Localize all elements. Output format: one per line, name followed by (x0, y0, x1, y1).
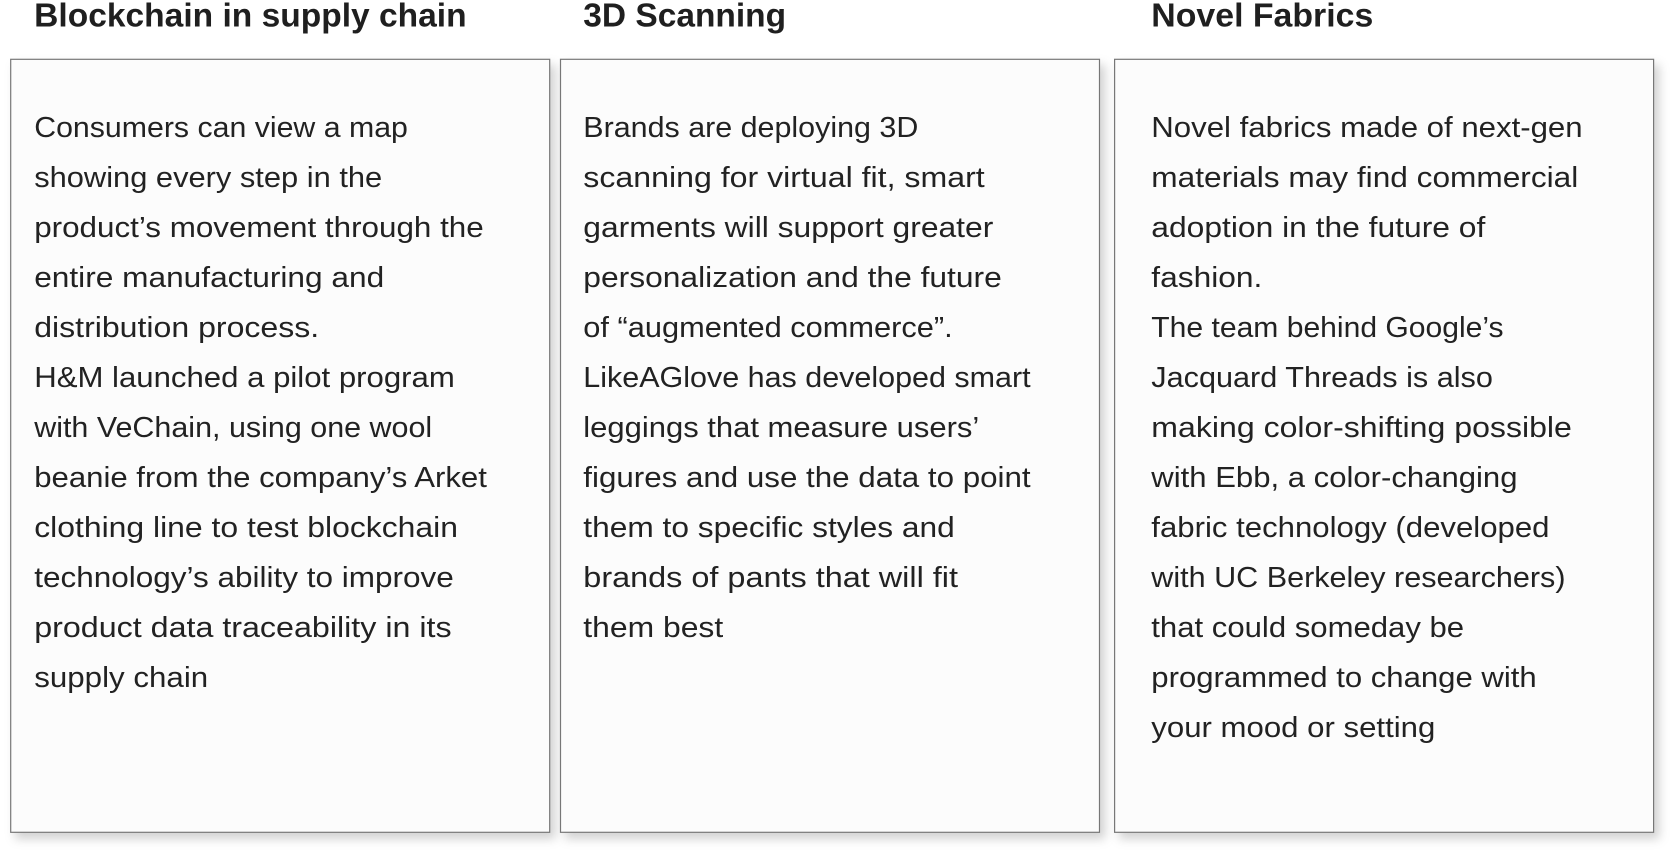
text block: 3D scanning description: garments will support greater (583, 212, 994, 244)
text block: 3D scanning description: LikeAGlove has developed smart (583, 362, 1031, 394)
card background (11, 59, 550, 832)
text block: novel fabrics description: programmed to change with (1151, 662, 1537, 694)
text block: 3D scanning description: of “augmented commerce”. (583, 312, 953, 344)
card background (1115, 59, 1654, 832)
text block: 3D scanning description: them to specific styles and (583, 512, 955, 544)
text block: 3D scanning description (583, 112, 1031, 644)
text block: novel fabrics description: that could someday be (1151, 612, 1464, 644)
text block: novel fabrics description: with Ebb, a color-changing (1150, 462, 1518, 494)
text block: 3D scanning description: figures and use the data to point (583, 462, 1031, 494)
text block: novel fabrics description: fashion. (1151, 262, 1262, 294)
text block: blockchain description: clothing line to test blockchain (34, 512, 458, 544)
text block: blockchain description: product data traceability in its (34, 612, 452, 644)
card background (560, 59, 1100, 832)
text block: novel fabrics description: fabric technology (developed (1151, 512, 1550, 544)
text block: blockchain description: distribution process. (34, 312, 319, 344)
text block: novel fabrics description: The team behind Google’s (1151, 312, 1504, 344)
panel: 3D Scanning (560, 0, 1100, 832)
text block: blockchain description: technology’s ability to improve (34, 562, 454, 594)
text block: 3D scanning description: Brands are deploying 3D (583, 112, 918, 144)
text block: 3D scanning description: scanning for virtual fit, smart (583, 162, 985, 194)
text block: novel fabrics description: materials may find commercial (1151, 162, 1578, 194)
panel: Novel Fabrics (1115, 0, 1654, 832)
text block: blockchain description: with VeChain, using one wool (33, 412, 432, 444)
text block: 3D scanning description: personalization and the future (583, 262, 1002, 294)
text block: blockchain description: supply chain (34, 662, 208, 694)
text block: blockchain description: entire manufacturing and (34, 262, 384, 294)
text block: novel fabrics description (1150, 112, 1583, 744)
text block: novel fabrics description: Novel fabrics made of next-gen (1151, 112, 1583, 144)
text block: 3D scanning description: them best (583, 612, 723, 644)
text block: novel fabrics description: with UC Berkeley researchers) (1150, 562, 1566, 594)
text block: blockchain description (33, 112, 487, 694)
text block: blockchain description: product’s movement through the (34, 212, 484, 244)
text block: blockchain description: beanie from the company’s Arket (34, 462, 487, 494)
text block: novel fabrics description: Jacquard Threads is also (1151, 362, 1493, 394)
text block: blockchain description: showing every step in the (34, 162, 382, 194)
text block: novel fabrics description: adoption in the future of (1151, 212, 1486, 244)
text block: blockchain description: H&M launched a pilot program (34, 362, 455, 394)
text block: 3D scanning description: brands of pants that will fit (583, 562, 958, 594)
panel: Blockchain in supply chain (11, 0, 550, 832)
text block: novel fabrics description: your mood or setting (1151, 712, 1435, 744)
text block: novel fabrics description: making color-shifting possible (1151, 412, 1572, 444)
text block: blockchain description: Consumers can view a map (34, 112, 408, 144)
text block: 3D scanning description: leggings that measure users’ (583, 412, 979, 444)
